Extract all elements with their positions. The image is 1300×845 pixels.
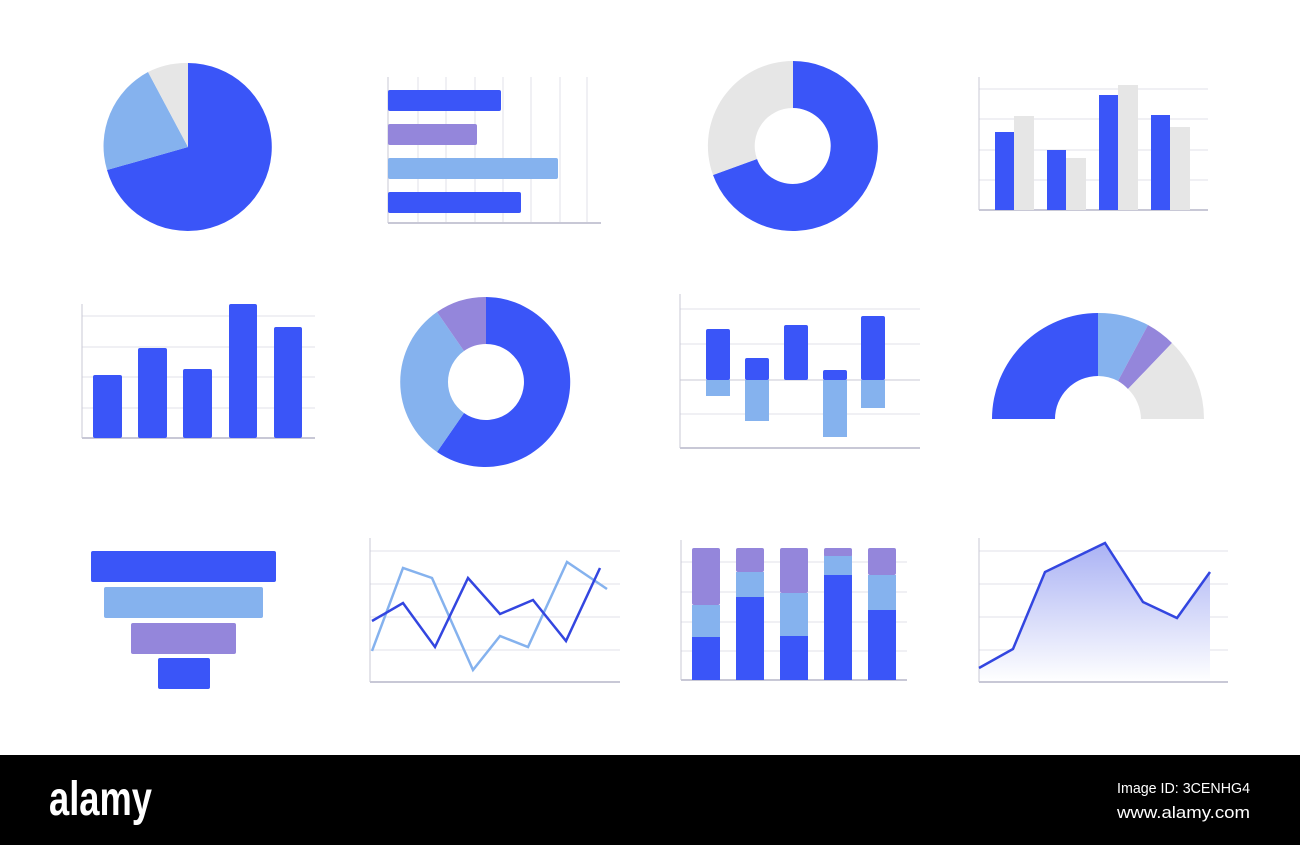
chart: donut 1 bbox=[708, 61, 878, 231]
chart: grouped bars bbox=[979, 77, 1208, 210]
footer url: www.alamy.com bbox=[1116, 803, 1250, 822]
footer logo: alamy bbox=[49, 773, 152, 826]
chart: area chart bbox=[979, 538, 1228, 682]
chart: vertical bars bbox=[82, 304, 315, 438]
chart: pie bbox=[104, 63, 272, 231]
chart: horizontal bars bbox=[388, 77, 601, 223]
footer band bbox=[0, 755, 1300, 845]
chart: stacked bars bbox=[681, 540, 907, 680]
chart: positive/negative bars bbox=[680, 294, 920, 448]
chart: half donut gauge bbox=[992, 313, 1204, 419]
footer image id: Image ID: 3CENHG4 bbox=[1117, 780, 1250, 797]
chart: line chart bbox=[370, 538, 620, 682]
chart: donut 2 bbox=[400, 297, 570, 467]
chart: funnel bbox=[91, 551, 276, 689]
